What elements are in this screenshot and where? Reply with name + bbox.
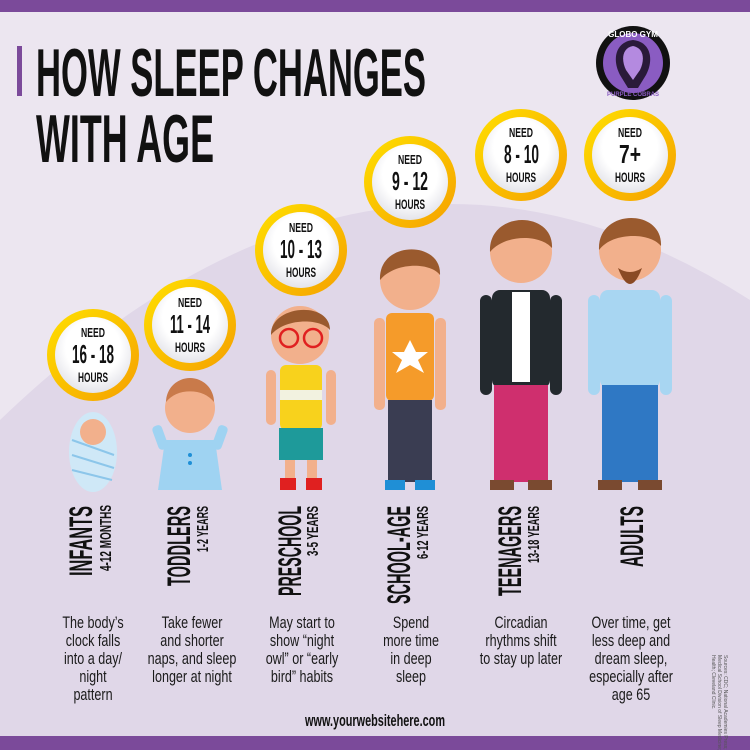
text: SCHOOL-AGE [381,506,417,604]
text: adults: Over time, get [592,613,671,633]
text: TODDLERS [161,506,197,586]
label: preschool [272,506,322,596]
text: toddlers: Take fewer [162,613,222,633]
label: infants: INFANTS [63,506,99,576]
badge: toddlers: HOURS [175,339,205,355]
badge: infants: HOURS [78,369,108,385]
text: preschool: owl” or “early [266,649,339,669]
label: school-age: 6-12 YEARS [415,506,432,559]
text: infants [62,613,124,705]
badge: adults: 7+ [619,139,641,169]
logo: Globo Gym: GLOBO GYM [608,30,658,39]
text: preschool: May start to [269,613,335,633]
text: adults: dream sleep, [595,649,667,669]
figure: school-age child [374,249,446,490]
bottom bar [0,736,750,750]
badge: infants: NEED [81,325,105,340]
text: infants: pattern [73,685,113,705]
label: infants: 4-12 MONTHS [98,505,115,571]
badge: toddlers [144,279,236,371]
text: preschool: bird” habits [271,667,333,687]
label: school-age [381,506,432,604]
text: adults: age 65 [612,685,650,705]
figure: preschooler [266,306,336,490]
text: school-age: more time [383,631,439,651]
figure: teenager [480,220,562,490]
text: adults [589,613,673,705]
text: school-age: sleep [396,667,426,687]
logo: Globo Gym: PURPLE COBRAS [607,92,659,98]
badge: school-age [364,136,456,228]
logo: Globo Gym [596,26,670,100]
badge: infants [47,309,139,401]
sources [710,655,728,750]
badge: preschool: HOURS [286,264,316,280]
badge: teenagers: NEED [509,125,533,140]
label: toddlers [161,506,212,586]
text: ADULTS [614,506,650,567]
label: teenagers [492,506,543,596]
badge: toddlers: NEED [178,295,202,310]
text: school-age: in deep [390,649,432,669]
badge: teenagers: HOURS [506,169,536,185]
text: infants: night [79,667,107,687]
label: teenagers: 13-18 YEARS [526,506,543,563]
text: TEENAGERS [492,506,528,596]
badge: adults [584,109,676,201]
text: teenagers [480,613,562,669]
text: toddlers: naps, and sleep [148,649,236,669]
text: teenagers: Circadian [494,613,548,633]
text: infants: into a day/ [64,649,123,669]
badge: preschool: NEED [289,220,313,235]
badge: school-age: HOURS [395,196,425,212]
figure: adult [588,218,672,490]
text: teenagers: to stay up later [480,649,562,669]
badge: teenagers: 8 - 10 [504,139,539,169]
text: infants: The body’s [62,613,124,633]
badge: preschool: 10 - 13 [280,234,322,264]
website: www.yourwebsitehere.com [304,711,445,730]
title: WITH AGE [36,101,214,177]
text: school-age: Spend [393,613,429,633]
badge: teenagers [475,109,567,201]
text: toddlers [148,613,236,687]
figure: toddler [151,378,229,490]
badge: adults: HOURS [615,169,645,185]
text: preschool [266,613,339,687]
badge: infants: 16 - 18 [72,339,114,369]
badge: adults: NEED [618,125,642,140]
text: adults: especially after [589,667,673,687]
sources: Health; Cleveland Clinic. [710,655,716,709]
text: toddlers: longer at night [152,667,233,687]
text: PRESCHOOL [272,506,308,596]
label: toddlers: 1-2 YEARS [195,506,212,552]
badge: toddlers: 11 - 14 [170,309,210,339]
text: infants: clock falls [66,631,120,651]
badge: school-age: 9 - 12 [392,166,428,196]
text: adults: less deep and [592,631,670,651]
badge: preschool [255,204,347,296]
text: school-age [383,613,439,687]
text: teenagers: rhythms shift [485,631,557,651]
label: infants [63,505,115,576]
badge: school-age: NEED [398,152,422,167]
title [17,35,426,177]
top bar [0,0,750,12]
text: preschool: show “night [270,631,335,651]
label: preschool: 3-5 YEARS [305,506,322,556]
text: toddlers: and shorter [160,631,224,651]
figure: infant [69,412,117,492]
